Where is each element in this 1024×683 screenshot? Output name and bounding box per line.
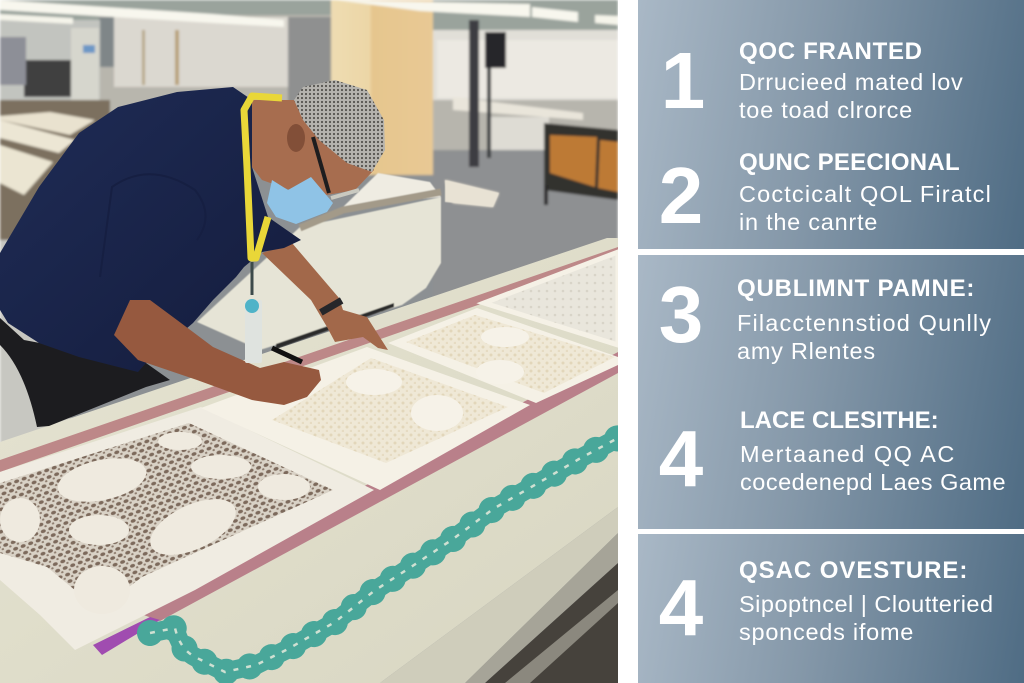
- panel: steps 3 and 4: [638, 255, 1024, 529]
- lace sheet 3: [388, 308, 618, 403]
- panel: steps 1 and 2: [638, 0, 1024, 249]
- text block 5: QSAC OVESTURE:: [739, 557, 968, 584]
- mask strap: [313, 137, 329, 193]
- text block 3: [737, 275, 992, 364]
- text block 2: [739, 149, 992, 235]
- lace sheet 4: [484, 252, 618, 345]
- shirt: [0, 87, 301, 372]
- watch band: [319, 297, 343, 315]
- number 1: 1: [661, 36, 705, 125]
- text block 1: QOC FRANTED: [739, 38, 923, 65]
- head: [252, 100, 374, 195]
- forearm holding pen: [114, 300, 321, 405]
- purple strip: [93, 617, 160, 655]
- glasses: [331, 190, 359, 198]
- text block 5: [739, 557, 994, 645]
- ID badge: [245, 300, 262, 363]
- teal lace border: [150, 438, 618, 672]
- text block 5: Sipoptncel | Cloutteried: [739, 591, 994, 617]
- lace sheets: [0, 252, 618, 650]
- text block 3: amy Rlentes: [737, 338, 876, 364]
- pen: [272, 348, 302, 362]
- photo: worker inspecting lace on a table: [0, 0, 618, 683]
- text block 1: toe toad clrorce: [739, 97, 913, 123]
- number 2: 2: [659, 151, 703, 240]
- text block 3: Filacctennstiod Qunlly: [737, 310, 992, 336]
- work table: [0, 238, 618, 683]
- text block 5: sponceds ifome: [739, 619, 914, 645]
- sleeve seam: [100, 174, 206, 277]
- text block 1: [739, 38, 964, 123]
- ear: [287, 124, 305, 152]
- text block 2: Coctcicalt QOL Firatcl: [739, 181, 992, 207]
- white table behind the worker: [197, 173, 499, 350]
- lace sheet 1: [0, 407, 374, 650]
- worker: [0, 80, 388, 427]
- lace sheet 2: [201, 347, 530, 490]
- face mask: [267, 177, 333, 224]
- text block 4: Mertaaned QQ AC: [740, 441, 956, 467]
- factory background: [0, 0, 618, 683]
- number 3: 3: [659, 270, 703, 359]
- text block 4: [740, 407, 1006, 495]
- lanyard: [244, 96, 282, 258]
- lanyard clip: [250, 262, 254, 295]
- trousers: [0, 318, 170, 427]
- text block 1: Drrucieed mated lov: [739, 69, 964, 95]
- number 4 second: 4: [659, 563, 703, 652]
- number 4: 4: [659, 414, 703, 503]
- panel: final step: [638, 534, 1024, 683]
- arm to left hand: [262, 243, 388, 350]
- text block 2: in the canrte: [739, 209, 878, 235]
- text block 2: QUNC PEECIONAL: [739, 149, 960, 176]
- hair net: [294, 80, 385, 172]
- text block 3: QUBLIMNT PAMNE:: [737, 275, 975, 302]
- text block 4: cocedenepd Laes Game: [740, 469, 1006, 495]
- text block 4: LACE CLESITHE:: [740, 407, 939, 434]
